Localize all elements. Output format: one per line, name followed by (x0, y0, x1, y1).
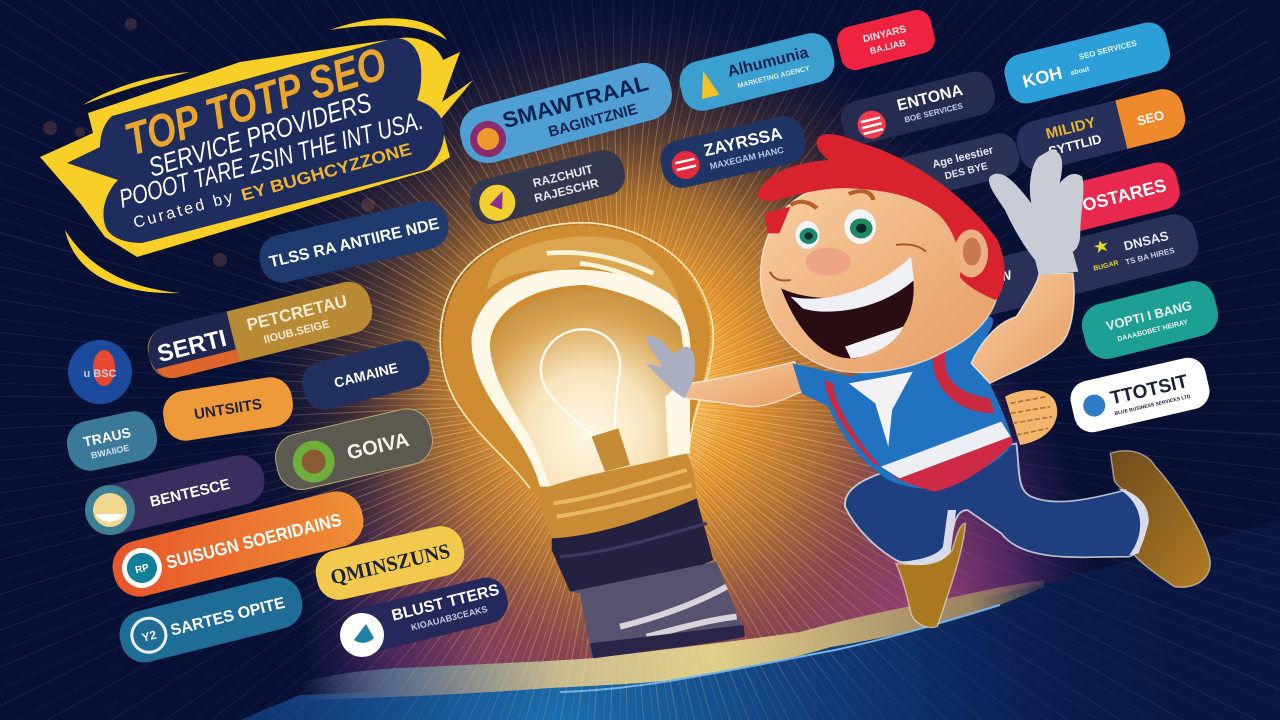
collar (849, 372, 913, 447)
pill: Alhumunia: MARKETING AGENCY (737, 65, 811, 90)
mouth (781, 277, 914, 358)
pill: BLUST: KIOAUAB3CEAKS (410, 604, 489, 633)
banner yellow frame (40, 38, 473, 257)
ground strip (240, 520, 1280, 720)
pill: BENTESCE (85, 450, 269, 539)
shirt white band (881, 422, 1011, 478)
pill: SERTI: PETCRETAU (245, 291, 349, 335)
pill: Alhumunia: Alhumunia (726, 44, 810, 81)
title line 2: SERVICE PROVIDERS (145, 87, 375, 183)
pill: STARES (1026, 159, 1184, 241)
pill: MILIDY (1012, 85, 1189, 175)
back boot (1110, 451, 1210, 587)
pill: TOTSIT: TTOTSIT (1108, 371, 1190, 409)
pill: MILIDY: SEO (1135, 107, 1166, 129)
nose (806, 248, 851, 276)
bulb halo line (440, 223, 713, 488)
smile lines (770, 244, 926, 281)
pill: SMAWTRAAL: SMAWTRAAL (500, 70, 651, 133)
pill: DINYARS: DINYARS (862, 24, 908, 45)
icon: blust badge (340, 613, 384, 657)
right arm (971, 273, 1074, 383)
pill: SARTES (114, 572, 307, 667)
glass inner glow (488, 290, 690, 487)
title line 1: TOP TOTP SEO (119, 37, 392, 166)
front boot (896, 523, 965, 628)
pill: KOH (1001, 19, 1174, 107)
title banner (40, 18, 473, 293)
eyes (795, 209, 876, 249)
pill: SUISUGN: RP (134, 562, 151, 576)
pill: ENTONA: ENTONA (895, 82, 965, 115)
pill: SERTI: IIOUB.SEIGE (263, 318, 331, 346)
pill: MILIDY: SYTTLID (1047, 131, 1103, 159)
head (760, 183, 999, 373)
pill: RAZITUT (466, 146, 629, 228)
lightbulb (440, 223, 745, 658)
pill: DINYARS: BA.LIAB (869, 37, 907, 56)
circle badge: BSC (68, 340, 132, 404)
pill: dark row behind arm: BUGAR (1093, 260, 1119, 273)
pill: SARTES: SARTES OPITE (169, 595, 287, 640)
shirt red hem (888, 437, 1013, 492)
screw base grey band (570, 562, 743, 657)
pill: KOH: KOH (1021, 63, 1064, 92)
pill: VOPTI: DAAABOBET HEIRAY (1117, 319, 1189, 343)
pill: ENTONA: BOE SERVICES (904, 101, 964, 124)
pill: SUISUGN: SUISUGN SOERIDAINS (164, 510, 344, 573)
pill: TOTSIT (1067, 354, 1213, 436)
pants cuffs (896, 488, 1149, 565)
pill: VOPTI: VOPTI I BANG (1104, 298, 1193, 334)
title line 3: POOOT TARE ZSIN THE INT USA. (116, 105, 426, 214)
banner swooshes (65, 18, 447, 293)
brows (791, 191, 873, 208)
pill: SERTI (143, 277, 377, 383)
pill: SMAWTRAAL: BAGINTZNIE (546, 101, 639, 141)
pill: MILIDY: MILIDY (1044, 114, 1097, 143)
pill: TRAUS: BWAIIOE (90, 443, 130, 461)
pill: RAZITUT: RAZCHUIT (531, 162, 595, 190)
ear (954, 229, 988, 277)
hair (757, 134, 1005, 300)
pill: TOTSIT: BLUE BUSINESS SERVICES LTD (1114, 394, 1192, 417)
filament stem (592, 428, 630, 472)
pill: RAZITUT: RAJESCHR (533, 176, 600, 205)
bulb glass silhouette (443, 225, 710, 492)
pill: leestier: DES BYE (944, 161, 989, 182)
pill: BLUST: BLUST TTERS (390, 581, 501, 625)
pill: UNTSITS: UNTSIITS (193, 396, 263, 423)
banner navy plate (67, 38, 444, 243)
pill: leestier (877, 130, 1023, 206)
pill: Alhumunia (675, 29, 839, 115)
pill: CAMINE: CAMAINE (332, 359, 400, 391)
pill: BLUST (341, 573, 512, 658)
icon: bentesce badge (85, 485, 135, 535)
pill: VOPTI (1077, 276, 1223, 364)
pill: BENTESCE: BENTESCE (148, 476, 232, 511)
bulb collar (528, 453, 696, 538)
curator name: EY BUGHCYZZONE (239, 140, 414, 205)
pill: QMINSZUNS: QMINSZUNS (328, 539, 452, 589)
pill: GOIVA: GOIVA (345, 429, 411, 465)
pill: SARTES: Y2 (140, 628, 158, 645)
pill: ZAYRSSA (656, 112, 810, 192)
pill: QMINSZUNS (311, 522, 469, 604)
pill: TRAUS (63, 407, 161, 475)
pill: dark row behind arm: OW (988, 267, 1014, 287)
glass top swoosh (487, 237, 680, 303)
mascot (646, 134, 1210, 628)
shirt (792, 317, 1013, 489)
pill: SUISUGN (107, 486, 369, 602)
screw base dark band (552, 498, 713, 592)
pill: dark row behind arm: TS BA HIRES (1124, 246, 1176, 267)
left arm (685, 362, 806, 407)
ticket (1005, 390, 1057, 445)
pill: SMAWTRAAL (454, 57, 678, 169)
pill: ZAYRSSA: ZAYRSSA (702, 124, 784, 160)
pill: ZAYRSSA: MAXEGAM HANC (709, 145, 785, 171)
radial speed lines (300, 80, 940, 720)
right glove (989, 150, 1083, 275)
glass white ribbon (472, 269, 690, 487)
ticket text (1011, 397, 1052, 435)
pill: KOH: about (1070, 66, 1091, 77)
pill: UNTSITS (160, 374, 296, 444)
pill: SERTI: SERTI (155, 325, 229, 368)
filament (541, 329, 620, 435)
pill: KOH: SEO SERVICES (1078, 38, 1138, 62)
pill: leestier: Age leestier (931, 144, 995, 171)
pill: dark row behind arm (957, 210, 1203, 320)
pill: TLSS (255, 197, 453, 287)
pill: TRAUS: TRAUS (82, 424, 132, 450)
pill: DINYARS (834, 7, 938, 73)
pill: STARES: OSTARES (1080, 175, 1168, 215)
curated by: Curated by (132, 189, 235, 232)
circle badge: BSC: u BSC (84, 368, 117, 380)
pill: GOIVA (271, 404, 437, 494)
pill: dark row behind arm: DNSAS (1122, 228, 1170, 254)
pants (845, 443, 1148, 564)
red straps (824, 350, 994, 467)
tongue tooth (845, 327, 903, 358)
pill: ENTONA (837, 68, 999, 148)
left glove (646, 336, 695, 398)
screw base foot (590, 625, 745, 658)
teeth (791, 257, 914, 312)
pill: TLSS: TLSS RA ANTIIRE NDE (268, 216, 441, 271)
pill: CAMINE (298, 336, 434, 414)
